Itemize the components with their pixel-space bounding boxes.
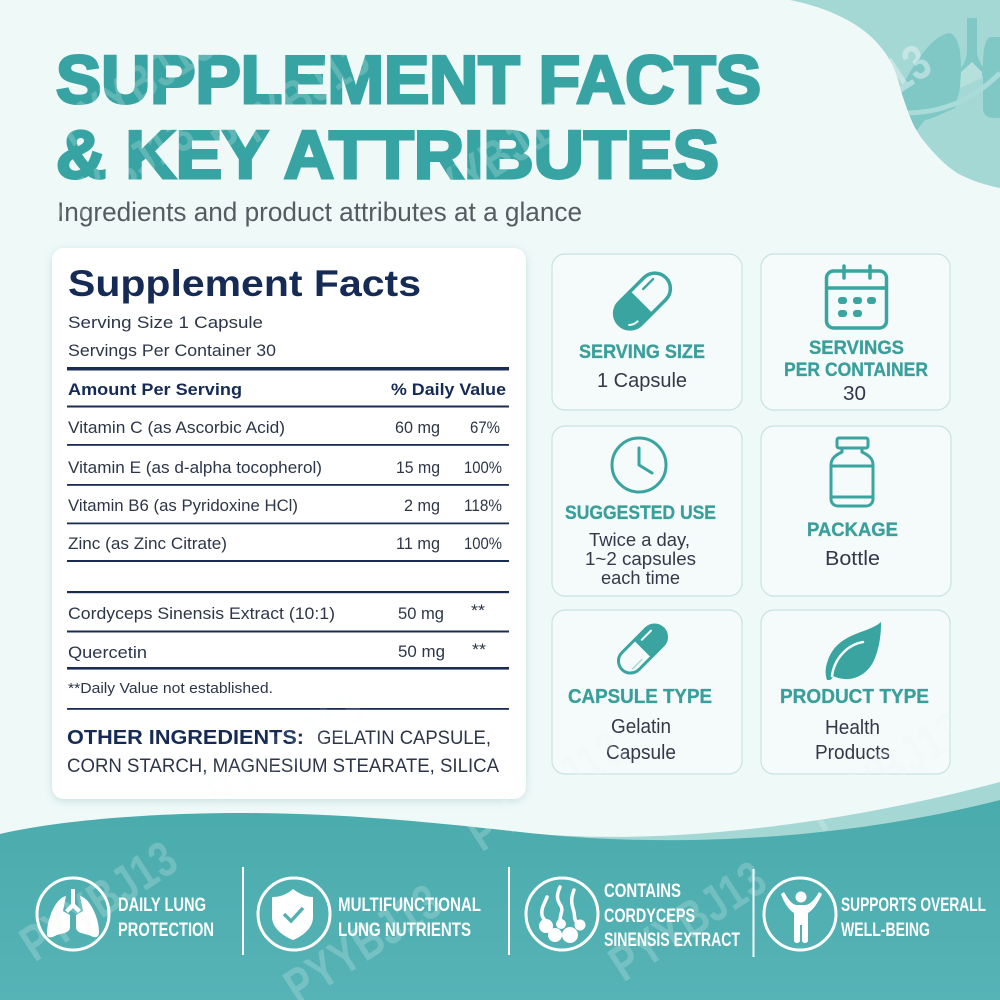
package text: PACKAGE bbox=[807, 519, 898, 541]
lung text: PROTECTION bbox=[118, 920, 214, 941]
watermarks: PYYBJ13 bbox=[457, 720, 634, 862]
benefit: daily lung protection bbox=[37, 878, 214, 950]
capsule type text: CAPSULE TYPE bbox=[568, 686, 712, 708]
panel: package bbox=[761, 426, 951, 596]
suggested use text bbox=[565, 502, 716, 588]
panel: supplement facts label bbox=[52, 248, 526, 799]
icon: capsule outline bbox=[614, 620, 671, 678]
servings text: PER CONTAINER bbox=[784, 359, 928, 381]
title bbox=[56, 42, 761, 193]
cordyceps text bbox=[604, 881, 740, 951]
icon: calendar bbox=[826, 266, 886, 328]
icon: shield bbox=[272, 889, 313, 940]
row: cordyceps: ** bbox=[471, 601, 485, 620]
row: vitamin B6: Vitamin B6 (as Pyridoxine HCl) bbox=[68, 496, 298, 515]
cordyceps text: SINENSIS EXTRACT bbox=[604, 930, 740, 951]
row: zinc bbox=[68, 534, 502, 553]
watermarks: PYYBJ13 bbox=[197, 680, 374, 822]
row: vitamin B6 bbox=[68, 496, 502, 515]
package text bbox=[807, 519, 898, 570]
suggested use text: SUGGESTED USE bbox=[565, 502, 716, 524]
other ingredients: CORN STARCH, MAGNESIUM STEARATE, SILICA bbox=[67, 756, 499, 777]
nutrients text bbox=[338, 895, 481, 941]
row: vitamin E bbox=[68, 458, 502, 477]
panel: serving size bbox=[552, 254, 742, 410]
table header: Amount Per Serving bbox=[68, 380, 242, 399]
icon: person bbox=[781, 892, 822, 943]
row: vitamin E: 100% bbox=[464, 458, 502, 477]
product type text: PRODUCT TYPE bbox=[780, 686, 929, 708]
benefit: contains cordyceps bbox=[526, 878, 740, 951]
cordyceps text: CORDYCEPS bbox=[604, 906, 695, 927]
serving size text: SERVING SIZE bbox=[579, 341, 705, 363]
subtitle: Ingredients and product attributes at a glance bbox=[57, 197, 582, 227]
lung text bbox=[118, 895, 214, 941]
icon: capsule bbox=[608, 267, 677, 335]
panel: servings per container bbox=[761, 254, 950, 410]
nutrients text: LUNG NUTRIENTS bbox=[338, 920, 471, 941]
servings text: SERVINGS bbox=[809, 337, 904, 359]
cordyceps text: CONTAINS bbox=[604, 881, 681, 902]
servings text: 30 bbox=[843, 383, 866, 405]
row: vitamin B6: 2 mg bbox=[404, 496, 440, 515]
row: zinc: Zinc (as Zinc Citrate) bbox=[68, 534, 227, 553]
title: SUPPLEMENT FACTS bbox=[56, 42, 761, 118]
row: vitamin C bbox=[68, 418, 500, 437]
row: quercetin: 50 mg bbox=[398, 642, 445, 661]
icon: leaf bbox=[826, 622, 881, 680]
product type text bbox=[780, 686, 929, 764]
decorative corner blob with lungs bbox=[780, 0, 1000, 195]
benefit: supports overall well-being bbox=[764, 878, 986, 950]
row: vitamin C: 60 mg bbox=[395, 418, 440, 437]
row: vitamin B6: 118% bbox=[464, 496, 502, 515]
capsule type text: Capsule bbox=[606, 742, 676, 764]
lung text: DAILY LUNG bbox=[118, 895, 206, 916]
benefit: multifunctional lung nutrients bbox=[258, 878, 481, 950]
panel: product type bbox=[761, 610, 950, 774]
icon: clock bbox=[612, 438, 666, 492]
title: & KEY ATTRIBUTES bbox=[56, 117, 719, 193]
row: zinc: 11 mg bbox=[396, 534, 440, 553]
watermarks: PYYBJ13 bbox=[402, 90, 579, 232]
watermarks: PYYBJ13 bbox=[27, 105, 204, 247]
icon: lungs bbox=[47, 889, 99, 937]
icon: bottle bbox=[831, 438, 873, 506]
row: cordyceps bbox=[68, 601, 485, 623]
footnote: **Daily Value not established. bbox=[68, 680, 273, 697]
row: vitamin E: 15 mg bbox=[396, 458, 440, 477]
serving info bbox=[68, 313, 276, 360]
row: vitamin E: Vitamin E (as d-alpha tocopherol) bbox=[68, 458, 322, 477]
serving info: Servings Per Container 30 bbox=[68, 341, 276, 360]
watermarks: PYYBJ13 bbox=[10, 830, 187, 972]
table header: % Daily Value bbox=[391, 380, 506, 399]
capsule type text bbox=[568, 686, 712, 764]
bottom wave band bbox=[0, 782, 1000, 1000]
panel: suggested use bbox=[552, 426, 742, 596]
serving size text bbox=[579, 341, 705, 392]
serving size text: 1 Capsule bbox=[597, 370, 687, 392]
servings text bbox=[784, 337, 928, 405]
well-being text bbox=[841, 895, 986, 941]
capsule type text: Gelatin bbox=[611, 716, 671, 738]
other ingredients: GELATIN CAPSULE, bbox=[317, 728, 491, 749]
watermarks: PYYBJ13 bbox=[764, 33, 941, 175]
suggested use text: each time bbox=[601, 567, 680, 588]
row: vitamin C: 67% bbox=[470, 418, 500, 437]
row: cordyceps: Cordyceps Sinensis Extract (10:1) bbox=[68, 604, 335, 623]
other ingredients: OTHER INGREDIENTS: bbox=[67, 727, 304, 749]
panel: capsule type bbox=[552, 610, 742, 774]
row: zinc: 100% bbox=[464, 534, 502, 553]
suggested use text: 1~2 capsules bbox=[585, 548, 696, 569]
watermarks: PYYBJ13 bbox=[202, 30, 379, 172]
product type text: Health bbox=[825, 717, 880, 739]
table header bbox=[68, 380, 506, 399]
icon: cordyceps bbox=[539, 887, 586, 943]
row: cordyceps: 50 mg bbox=[398, 604, 444, 623]
serving info: Serving Size 1 Capsule bbox=[68, 313, 263, 332]
product type text: Products bbox=[815, 742, 890, 764]
row: quercetin bbox=[68, 640, 486, 662]
nutrients text: MULTIFUNCTIONAL bbox=[338, 895, 481, 916]
suggested use text: Twice a day, bbox=[589, 529, 690, 550]
row: quercetin: ** bbox=[472, 640, 486, 659]
other ingredients bbox=[67, 727, 499, 777]
package text: Bottle bbox=[825, 548, 880, 570]
supplement facts heading: Supplement Facts bbox=[68, 263, 421, 304]
well-being text: WELL-BEING bbox=[841, 920, 930, 941]
row: quercetin: Quercetin bbox=[68, 643, 147, 662]
row: vitamin C: Vitamin C (as Ascorbic Acid) bbox=[68, 418, 285, 437]
watermarks: PYYBJ13 bbox=[599, 850, 776, 992]
